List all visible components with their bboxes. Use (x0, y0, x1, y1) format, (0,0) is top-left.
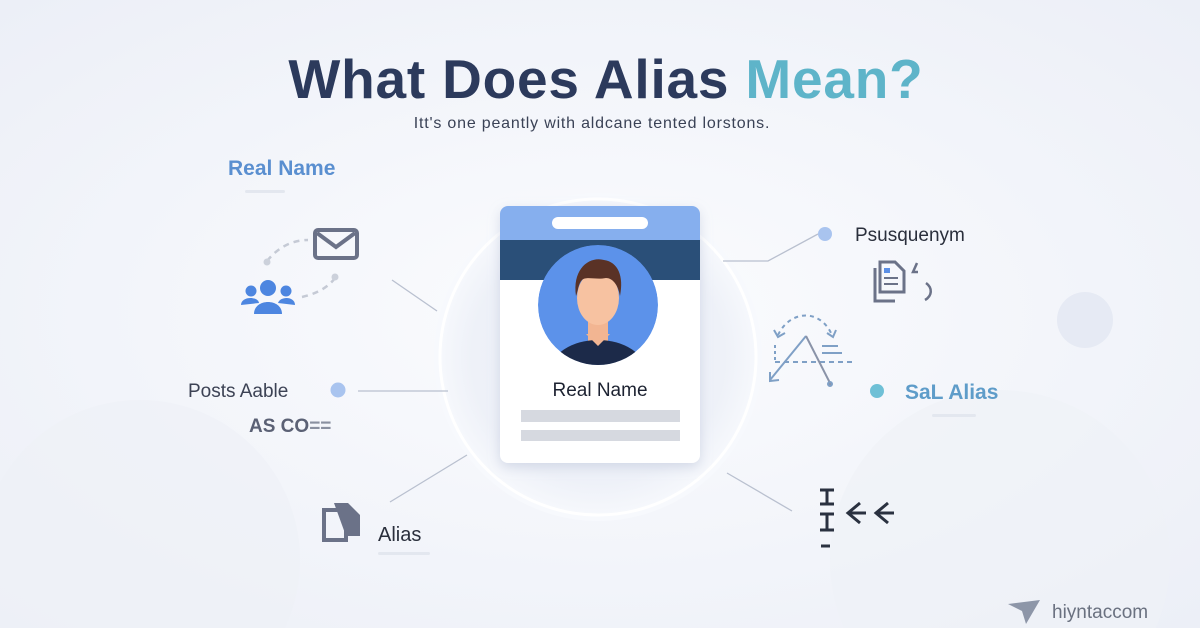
label: Alias with icon: Alias (378, 524, 421, 546)
label: Real Name (228, 157, 335, 193)
card pill (552, 217, 648, 229)
icon: envelope and people (241, 230, 357, 314)
icon: dashed arrows A (770, 315, 852, 386)
subtitle: Itt's one peantly with aldcane tented lorstons. (414, 115, 770, 132)
label: Psusquenym: Psusquenym (855, 225, 965, 246)
label: Posts Aable: Posts Aable (188, 381, 288, 402)
watermark (1008, 600, 1148, 624)
title: What Does Alias Mean? (288, 48, 924, 110)
avatar (538, 245, 658, 365)
label: Alias with icon (324, 503, 430, 555)
card name: Real Name (552, 380, 648, 401)
watermark: hiyntaccom (1052, 602, 1148, 623)
label: Real Name: Real Name (228, 157, 335, 180)
ID card (500, 206, 700, 463)
label: Psusquenym (818, 225, 965, 301)
label: SaL Alias: SaL Alias (905, 381, 998, 404)
label: Posts Aable (188, 381, 346, 437)
connector lines (358, 234, 818, 511)
label: Posts Aable: AS CO== (249, 416, 331, 437)
central circle (434, 193, 762, 521)
icon: text cursor arrows (820, 490, 894, 546)
label: SaL Alias (870, 381, 998, 417)
